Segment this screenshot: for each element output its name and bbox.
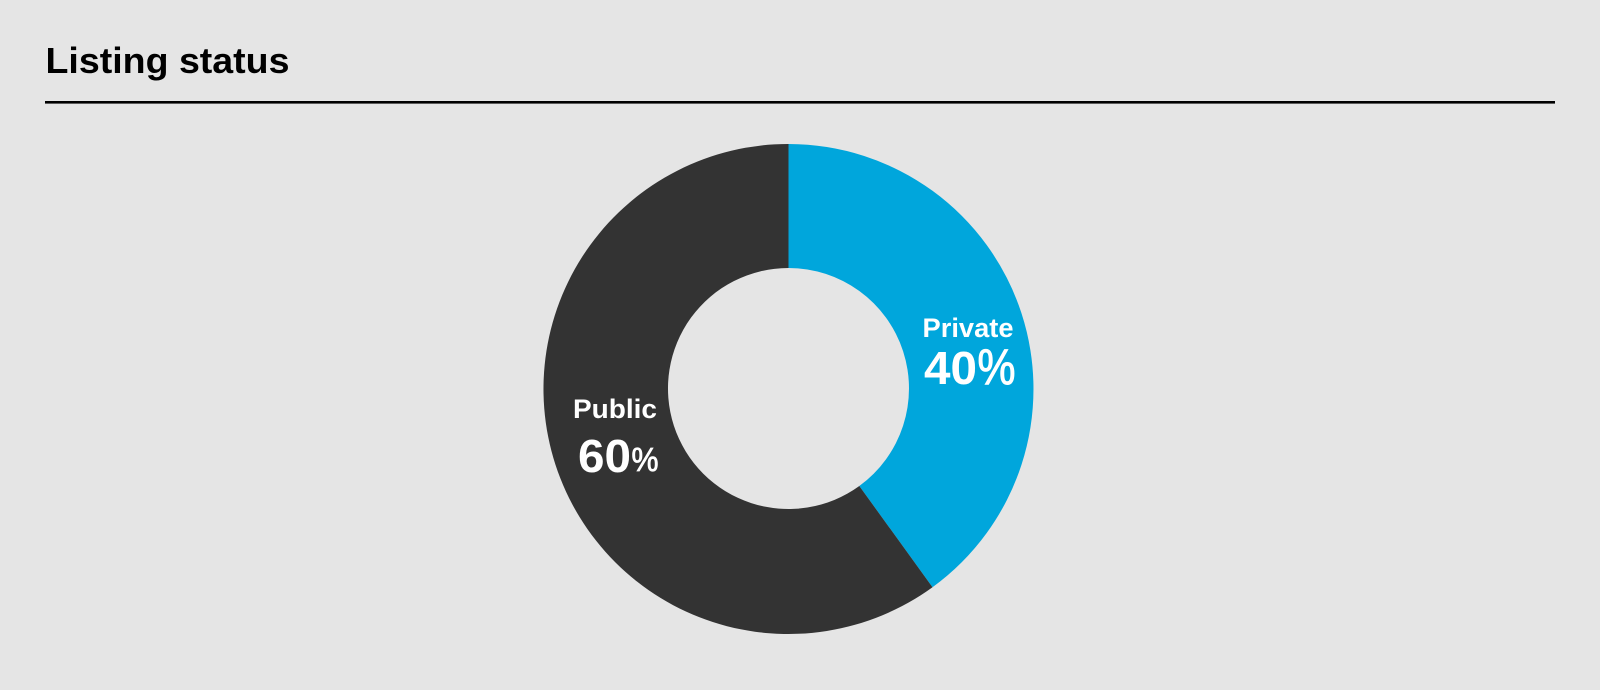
donut chart xyxy=(543,144,1033,634)
label: private: 40 xyxy=(924,342,977,394)
label: private xyxy=(922,313,1016,395)
label: public: % xyxy=(632,441,658,478)
label: private: % xyxy=(978,339,1016,395)
title: Listing status xyxy=(46,40,290,81)
label: public: Public xyxy=(573,394,657,424)
label: public xyxy=(573,394,658,482)
segment: private 40% xyxy=(788,144,1033,587)
segment: public 60% xyxy=(543,144,932,634)
label: private: Private xyxy=(922,313,1014,343)
label: public: 60 xyxy=(578,430,631,482)
